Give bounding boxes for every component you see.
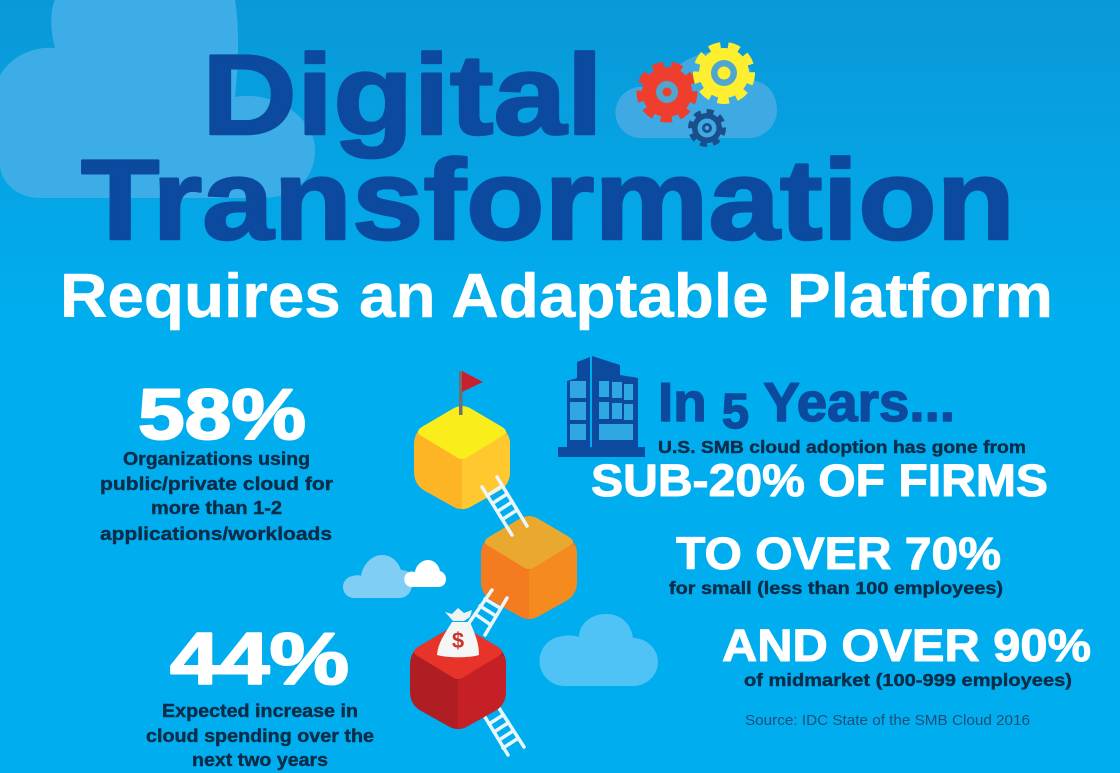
illustration: yellow cube <box>414 406 510 509</box>
description: 58%: applications/workloads <box>100 524 332 544</box>
title: Digital: Digital <box>202 32 603 159</box>
description: 58%: public/private cloud for <box>100 474 333 494</box>
background cloud: top left <box>0 0 315 198</box>
stat: 44% <box>146 619 374 770</box>
heading: In 5 Years: 5 <box>722 385 749 439</box>
red gear <box>641 66 693 118</box>
description: 44% <box>146 701 374 770</box>
number: 44%: 44% <box>170 619 349 700</box>
icon: money bag <box>437 608 479 657</box>
description: 44%: cloud spending over the <box>146 726 374 746</box>
illustration: small white cloud <box>404 560 446 587</box>
heading: In 5 Years: In <box>658 371 707 433</box>
illustration: large pale cloud <box>540 614 658 686</box>
description: 58% <box>100 449 333 544</box>
number: 58%: 58% <box>138 376 306 455</box>
stat: 58% <box>100 376 333 544</box>
illustration: small pale cloud <box>343 555 413 598</box>
illustration: ladder lower <box>485 708 524 755</box>
icon: money bag: $ <box>452 628 464 653</box>
stat: sub-20% of firms: SUB-20% OF FIRMS <box>591 455 1048 506</box>
navy gear <box>691 112 723 144</box>
text: midmarket definition: of midmarket (100-999 employees) <box>744 670 1072 690</box>
description: 58%: more than 1-2 <box>151 498 282 518</box>
description: 44%: Expected increase in <box>162 701 358 721</box>
illustration: orange cube <box>481 516 577 619</box>
description: 58%: Organizations using <box>123 449 310 469</box>
illustration: red cube <box>410 626 506 729</box>
title: Transformation: Transformation <box>81 137 1015 264</box>
gear cloud <box>615 52 777 138</box>
icon: office building <box>558 356 645 457</box>
subtitle: Requires an Adaptable Platform <box>60 262 1053 331</box>
yellow gear <box>698 47 750 99</box>
source note: Source: IDC State of the SMB Cloud 2016 <box>745 712 1030 729</box>
icon: flag <box>459 371 483 415</box>
illustration: ladder middle <box>469 590 507 635</box>
description: 44%: next two years <box>192 750 328 770</box>
icon: cloud with gears <box>615 47 777 144</box>
text: small business definition: for small (less than 100 employees) <box>669 578 1003 598</box>
illustration: ladder upper <box>482 477 527 535</box>
heading: In 5 Years: Years... <box>749 371 955 433</box>
stat: to over 70%: TO OVER 70% <box>676 528 1001 579</box>
stat: and over 90%: AND OVER 90% <box>722 620 1091 671</box>
text: SMB adoption intro: U.S. SMB cloud adoption has gone from <box>658 437 1026 457</box>
